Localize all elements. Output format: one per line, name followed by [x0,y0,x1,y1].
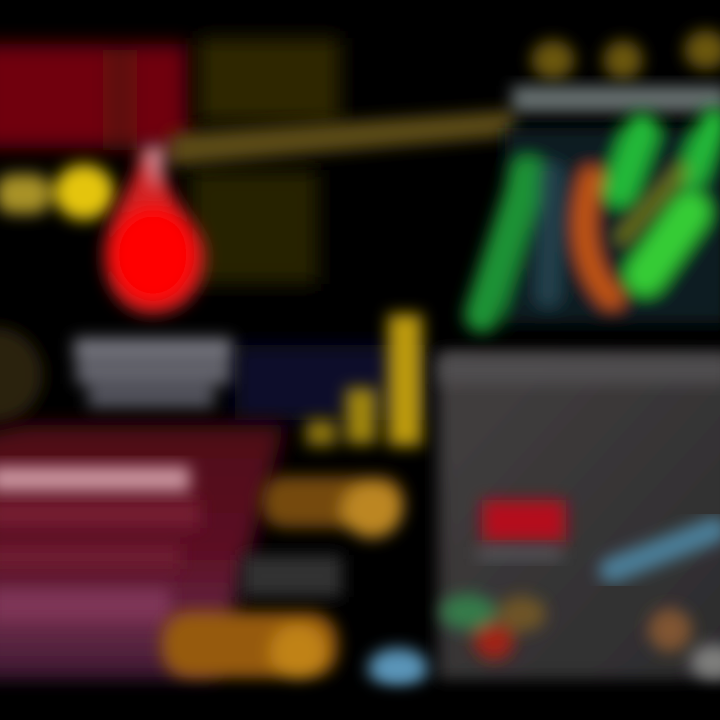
icon: green and red mix [440,594,546,660]
icons: gold markers [531,30,720,80]
panel header band [440,356,720,384]
text block: gray caption [242,555,342,597]
icon: blue streak [612,530,715,570]
chart: streak area [482,122,720,323]
panel: top-left red banner [0,44,188,150]
callout: orange pill upper [262,476,404,538]
list rows [0,500,200,622]
panel: olive upper block [198,38,340,122]
icon: red drop [104,145,205,314]
icon: orange mark [648,608,692,652]
band: gray header strip [512,86,720,112]
icon: light corner mark [690,644,720,680]
text block: white list heading [0,466,190,492]
callout: orange pill lower [162,612,338,680]
decorative circle: dark brown [0,327,43,423]
connector line: gold [170,110,515,166]
icon: blue badge [368,648,428,688]
icon: red block [482,500,566,542]
bottom edge [0,692,720,720]
text line under red block [478,546,562,560]
panel: gray lower right [438,352,720,680]
panel: navy backdrop [235,345,425,420]
bar chart: gold bars [306,314,422,446]
panel: olive lower block [190,170,318,284]
panel: red list [0,425,285,680]
yellow highlight blobs [0,164,114,220]
text block: gray heading [74,338,232,408]
